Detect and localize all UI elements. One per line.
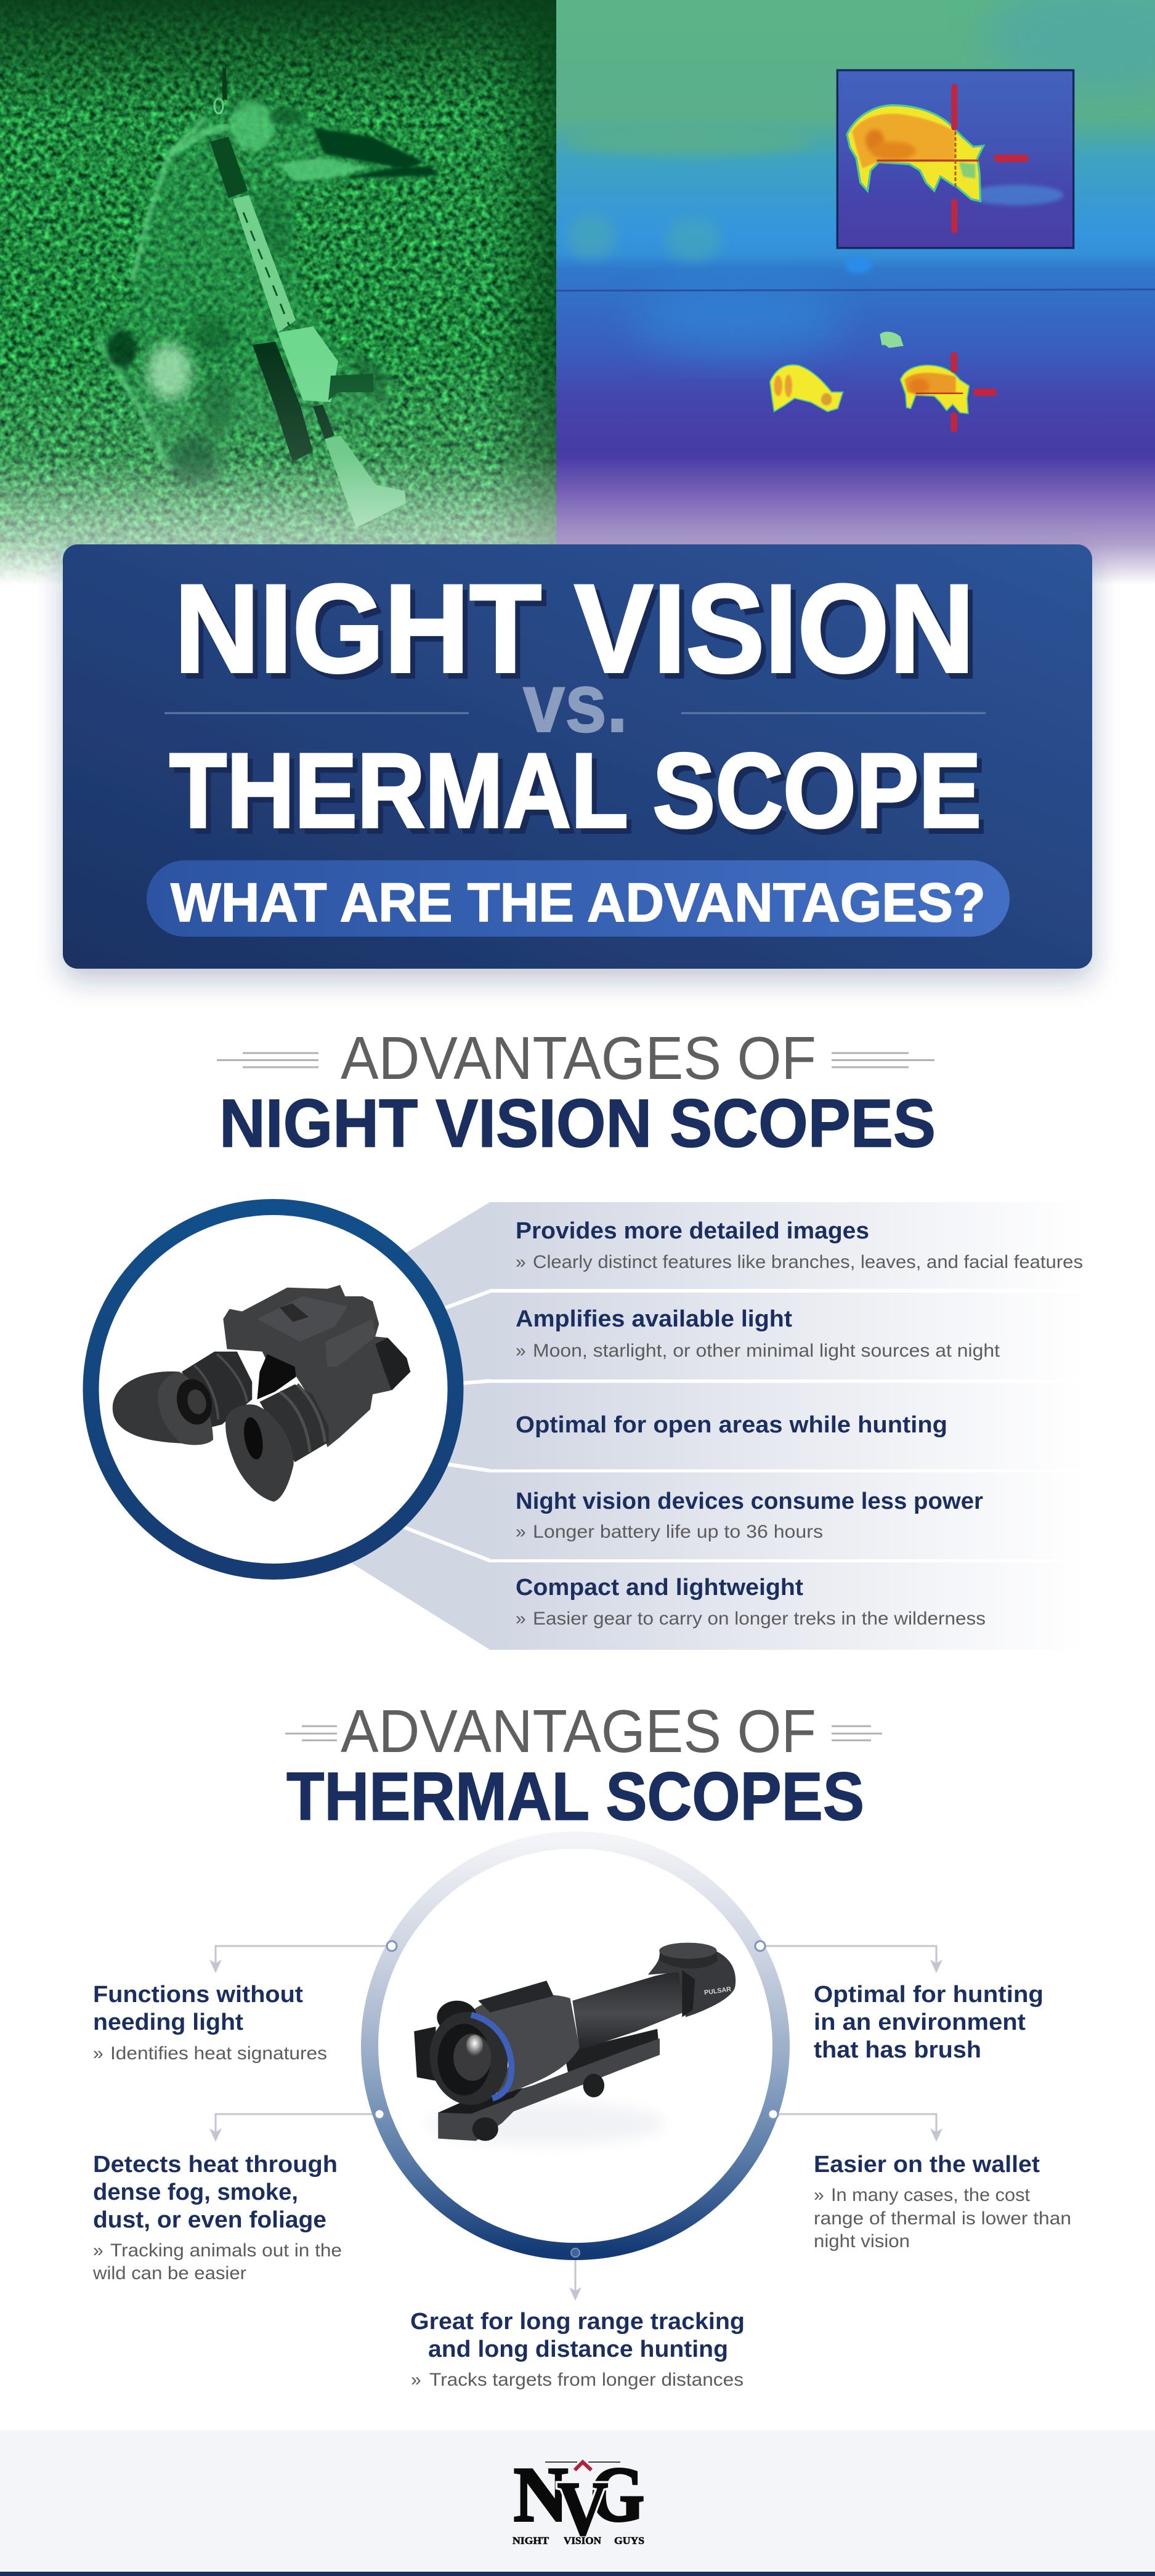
connectors with arrows (209, 1946, 942, 2301)
row: consume less power: » (516, 1522, 526, 1542)
row: provides more detailed images: Provides more detailed images (516, 1218, 869, 1244)
thermal inset view (837, 70, 1074, 248)
text: easier on the wallet: » (814, 2185, 824, 2205)
icon: thermal scope (414, 1943, 736, 2144)
text: great for long range: and long distance hunting (428, 2336, 728, 2362)
title panel (63, 544, 1092, 969)
circle frame (91, 1207, 456, 1572)
text: detects heat through fog: wild can be easier (92, 2263, 246, 2283)
subtitle pill: WHAT ARE THE ADVANTAGES? (171, 871, 986, 933)
text: great for long range: Tracks targets from longer distances (429, 2370, 744, 2390)
rifle (210, 68, 406, 528)
thermal imaging photo (556, 0, 1155, 585)
divider with vs.: vs. (523, 656, 628, 749)
heading: advantages of night vision scopes: NIGHT VISION SCOPES (219, 1086, 936, 1161)
text: great for long range (410, 2309, 745, 2390)
text: functions without needing light (93, 1982, 327, 2064)
text: detects heat through fog: dense fog, smoke, (93, 2179, 298, 2205)
row: amplifies available light: Moon, starlight, or other minimal light sources at night (533, 1341, 1000, 1361)
row: provides more detailed images (490, 1202, 1088, 1289)
row: consume less power (490, 1472, 1088, 1559)
footer (0, 2430, 1155, 2576)
heading: advantages of thermal scopes (285, 1697, 882, 1835)
text: detects heat through fog: Detects heat through (93, 2152, 338, 2178)
text: detects heat through fog: » (93, 2240, 103, 2261)
connector dots (375, 1941, 778, 2257)
logo: NVG: VISION (564, 2535, 602, 2546)
small distant animal (880, 332, 904, 348)
logo: NVG: N (514, 2452, 568, 2538)
logo: NVG: GUYS (614, 2535, 644, 2546)
icon: thermal scope: PULSAR (703, 1985, 732, 1997)
logo: NVG (513, 2452, 644, 2551)
logo: NVG: NIGHT (513, 2535, 549, 2546)
row: optimal for open areas (490, 1383, 1088, 1469)
row: compact and lightweight: Easier gear to carry on longer treks in the wilderness (533, 1609, 986, 1629)
logo: NVG: V (557, 2466, 608, 2551)
text: optimal for hunting in brush: Optimal for hunting (814, 1982, 1044, 2008)
row: amplifies available light: » (516, 1341, 526, 1361)
circle frame (370, 1840, 781, 2251)
text: great for long range: Great for long range tracking (410, 2309, 745, 2335)
icon: night vision binocular (113, 1285, 410, 1501)
text: easier on the wallet (814, 2152, 1071, 2251)
text: easier on the wallet: night vision (814, 2231, 910, 2251)
text: functions without needing light: Identifies heat signatures (110, 2043, 327, 2064)
thermal animal left (770, 365, 843, 411)
text: detects heat through fog: Tracking animals out in the (110, 2240, 342, 2261)
row: amplifies available light: Amplifies available light (516, 1306, 792, 1332)
row: amplifies available light (490, 1293, 1088, 1379)
row: consume less power: Night vision devices consume less power (516, 1488, 983, 1514)
heading: advantages of thermal scopes: ADVANTAGES OF (341, 1697, 816, 1765)
text: optimal for hunting in brush: in an environment (814, 2009, 1026, 2035)
panel: thermal advantages (92, 1840, 1071, 2390)
heading: advantages of night vision scopes: ADVANTAGES OF (341, 1024, 816, 1092)
row: compact and lightweight: Compact and lightweight (516, 1575, 803, 1601)
text: easier on the wallet: Easier on the wallet (814, 2152, 1040, 2178)
text: functions without needing light: » (93, 2043, 103, 2064)
logo: NVG: G (590, 2452, 644, 2538)
row: provides more detailed images: » (516, 1252, 526, 1272)
text: functions without needing light: Functions without (93, 1982, 303, 2008)
row: optimal for open areas: Optimal for open areas while hunting (516, 1412, 947, 1438)
row: compact and lightweight: » (516, 1609, 526, 1629)
title: night vision: NIGHT VISION (174, 559, 975, 699)
heading: advantages of night vision scopes (217, 1024, 936, 1161)
text: great for long range: » (411, 2370, 421, 2390)
text: functions without needing light: needing light (93, 2009, 243, 2035)
thermal animal right with crosshair (901, 352, 997, 432)
logo: NVG: V (557, 2466, 608, 2551)
row: consume less power: Longer battery life up to 36 hours (533, 1522, 823, 1542)
text: optimal for hunting in brush (814, 1982, 1044, 2063)
row: provides more detailed images: Clearly distinct features like branches, leaves, and facial features (533, 1252, 1083, 1272)
text: optimal for hunting in brush: that has brush (814, 2037, 981, 2063)
heading: advantages of thermal scopes: THERMAL SCOPES (286, 1759, 864, 1835)
text: easier on the wallet: range of thermal is lower than (814, 2208, 1071, 2229)
fan connecting circle to rows (333, 1202, 490, 1650)
title: thermal scope: THERMAL SCOPE (169, 732, 981, 850)
boar lying in the grass (97, 97, 439, 488)
text: easier on the wallet: In many cases, the cost (831, 2185, 1031, 2205)
night vision photo (0, 0, 556, 585)
text: detects heat through fog: dust, or even foliage (93, 2207, 326, 2233)
text: detects heat through fog (92, 2152, 342, 2283)
thermal field animals (770, 332, 997, 432)
row: compact and lightweight (490, 1562, 1088, 1650)
panel: night vision advantages (91, 1202, 1088, 1650)
